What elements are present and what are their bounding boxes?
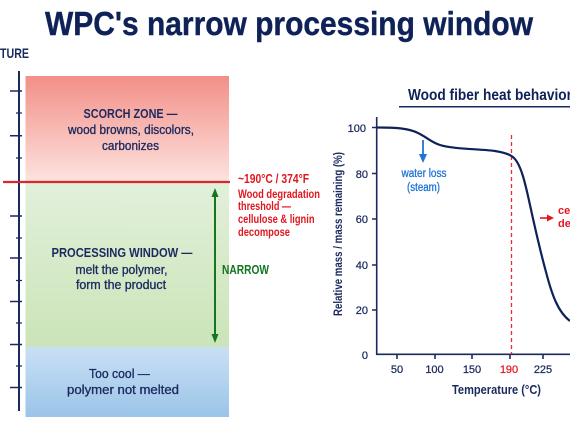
x tick labels: 190 (500, 364, 518, 376)
mass curve (377, 128, 570, 321)
temperature axis label: TURE (0, 45, 29, 61)
y tick labels: 80 (356, 169, 368, 181)
threshold dashed line (510, 135, 512, 354)
panel: scorch zone: SCORCH ZONE — (84, 107, 178, 121)
y tick labels: 100 (348, 123, 366, 135)
panel: scorch zone: carbonizes (102, 139, 159, 153)
chart axes (372, 117, 570, 359)
panel: scorch zone (26, 76, 229, 182)
panel: too cool: polymer not melted (67, 382, 179, 397)
water loss label: (steam) (407, 182, 440, 194)
y axis title: Relative mass / mass remaining (%) (333, 152, 345, 316)
narrow double arrow (212, 188, 218, 343)
y tick labels: 40 (356, 260, 368, 272)
panel: processing window: melt the polymer, (76, 263, 168, 277)
temperature axis (10, 71, 22, 411)
panel: processing window: form the product (76, 278, 167, 292)
x tick labels (391, 364, 552, 376)
decomposition label (558, 205, 570, 230)
threshold callout: ~190°C / 374°F (238, 172, 309, 186)
line chart: wood fiber mass vs temperature (333, 117, 570, 397)
x tick labels: 150 (463, 364, 481, 376)
x tick labels: 50 (391, 364, 403, 376)
title: WPC's narrow processing window (45, 5, 533, 42)
threshold callout: Wood degradation (238, 189, 320, 201)
threshold callout: threshold — (238, 201, 291, 213)
x tick labels: 225 (534, 364, 552, 376)
panel: too cool: Too cool — (89, 366, 150, 381)
x axis title: Temperature (°C) (452, 382, 541, 397)
threshold callout (238, 172, 320, 239)
panel: too cool (26, 347, 229, 417)
water loss label: water loss (401, 168, 447, 180)
threshold callout: decompose (238, 227, 290, 239)
y tick labels: 0 (362, 350, 368, 362)
x tick labels: 100 (425, 364, 444, 376)
threshold callout: cellulose & lignin (238, 214, 314, 226)
panel: processing window: PROCESSING WINDOW — (52, 246, 193, 260)
y tick labels (348, 123, 368, 362)
panel: processing window (26, 182, 229, 347)
narrow label: NARROW (222, 263, 269, 277)
water loss label (401, 168, 447, 194)
threshold line (3, 181, 230, 183)
y tick labels: 20 (356, 305, 368, 317)
y tick labels: 60 (356, 214, 368, 226)
decomposition arrow (540, 214, 554, 222)
water loss arrow (419, 140, 427, 163)
panel: scorch zone: wood browns, discolors, (67, 123, 194, 137)
